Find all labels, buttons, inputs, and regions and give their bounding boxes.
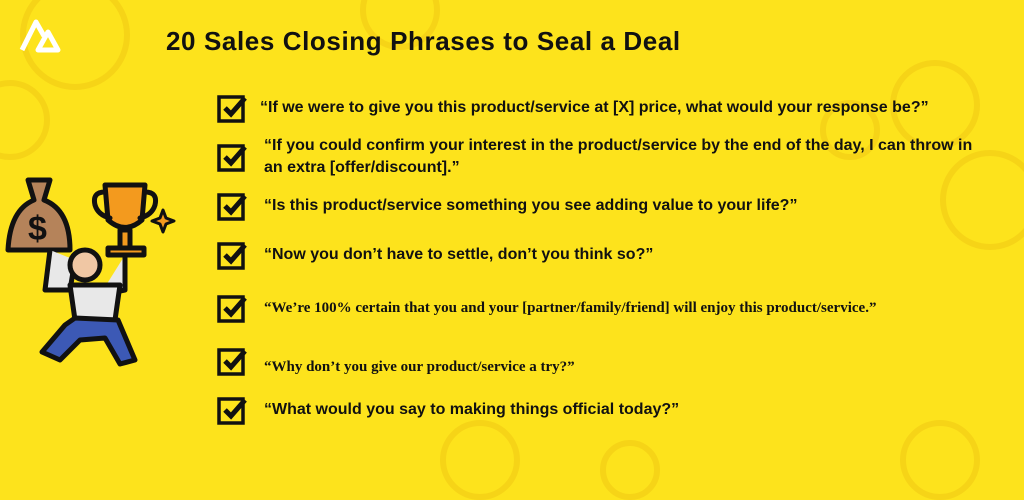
illustration: person holding money bag and trophy: $ — [28, 210, 47, 248]
checklist item 4 — [217, 242, 653, 270]
logo — [20, 20, 60, 52]
title: 20 Sales Closing Phrases to Seal a Deal — [166, 26, 681, 56]
checklist item 7: “What would you say to making things official today?” — [264, 401, 679, 418]
checklist item 5 — [217, 295, 876, 323]
illustration: person holding money bag and trophy — [6, 178, 176, 366]
checklist item 2: “If you could confirm your interest in the product/service by the end of the day, I can throw in an extra [offer/discount].” — [264, 137, 972, 176]
checklist item 4: “Now you don’t have to settle, don’t you think so?” — [264, 246, 653, 263]
checklist item 5: “We’re 100% certain that you and your [partner/family/friend] will enjoy this product/service.” — [264, 300, 876, 316]
checklist item 7 — [217, 397, 679, 425]
checklist item 3: “Is this product/service something you see adding value to your life?” — [264, 197, 797, 214]
checklist item 6 — [217, 348, 575, 376]
checklist item 6: “Why don’t you give our product/service a try?” — [264, 359, 575, 375]
checklist item 1: “If we were to give you this product/service at [X] price, what would your response be?” — [260, 99, 929, 116]
checklist item 3 — [217, 193, 797, 221]
checklist item 1 — [217, 95, 929, 123]
